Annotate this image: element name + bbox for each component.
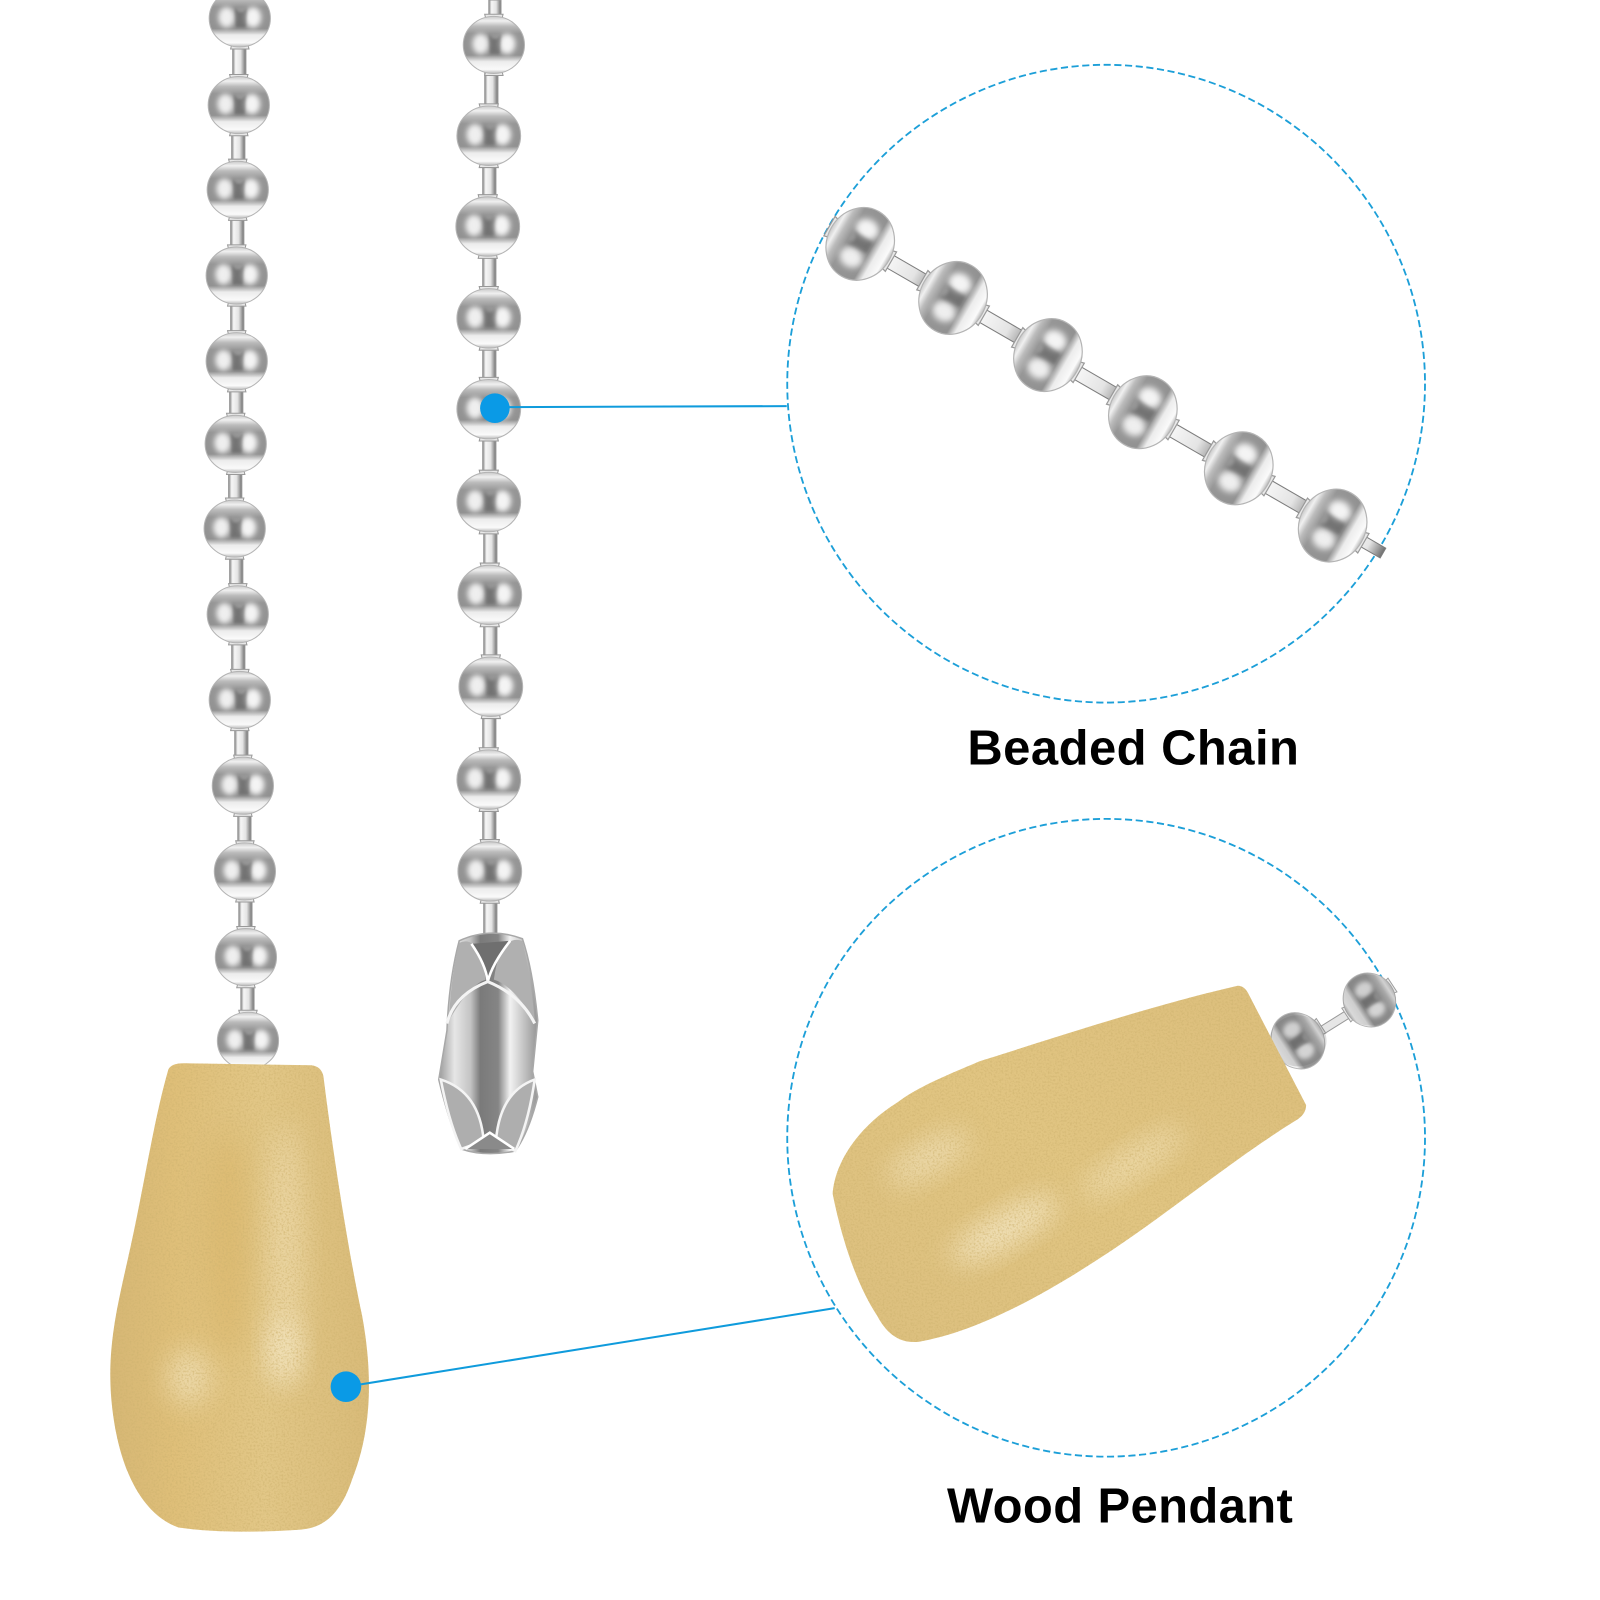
detail circle: wood pendant — [787, 819, 1425, 1457]
right beaded chain — [456, 0, 524, 939]
callout connector: beaded chain — [480, 393, 787, 423]
left wood pendant — [102, 1061, 378, 1536]
left beaded chain — [204, 0, 279, 1071]
heading: Beaded Chain: Beaded Chain — [967, 721, 1299, 775]
infographic canvas — [110, 0, 1426, 1532]
heading: Wood Pendant: Wood Pendant — [947, 1479, 1293, 1533]
detail circle: beaded chain — [787, 65, 1425, 703]
chain clasp — [439, 933, 538, 1154]
callout connector: wood pendant — [331, 1308, 835, 1402]
